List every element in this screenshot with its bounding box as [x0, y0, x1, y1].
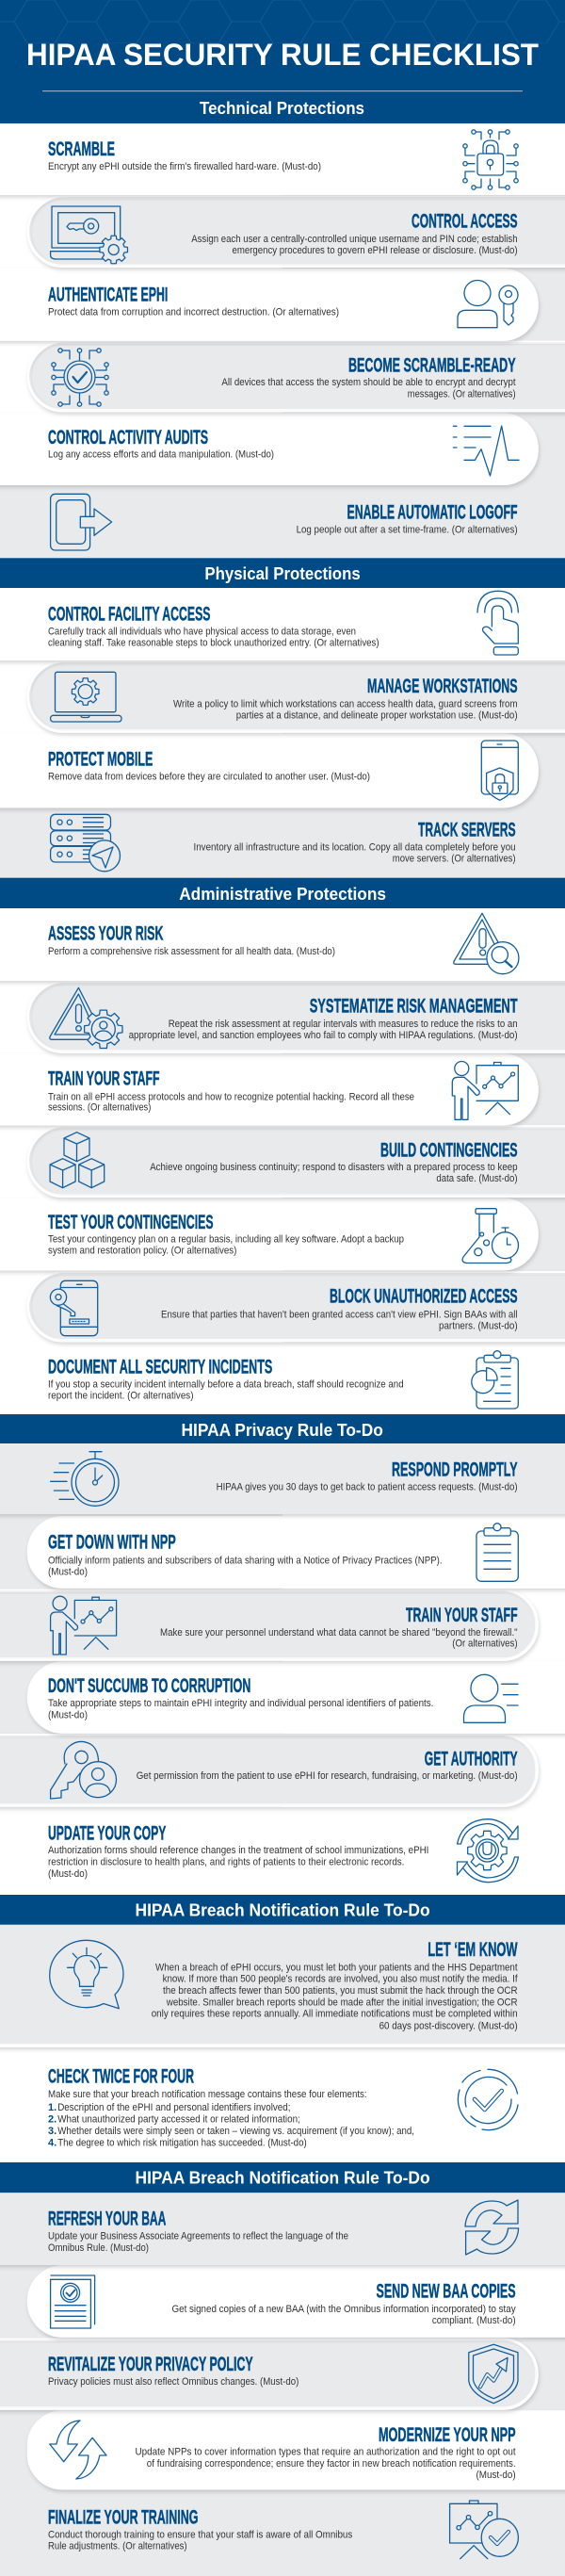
row: protect mobile: Remove data from devices before they are circulated to another user. (Must-do) — [48, 772, 370, 783]
icon: up and down curved arrows — [50, 2421, 106, 2479]
row: control access: Assign each user a centrally-controlled unique username and PIN code; establish — [191, 234, 518, 245]
icon: phone with shield lock — [481, 741, 518, 800]
row: refresh your BAA: REFRESH YOUR BAA — [48, 2209, 166, 2230]
row: scramble: SCRAMBLE — [48, 139, 115, 160]
row: track servers — [0, 806, 565, 878]
icon: key with user — [51, 1741, 117, 1799]
row: build contingencies — [29, 1127, 565, 1196]
row: respond promptly — [0, 1443, 565, 1514]
row: send new BAA copies: Get signed copies of a new BAA (with the Omnibus information incorporated) to stay — [171, 2304, 516, 2315]
icon: check in circles — [458, 2069, 518, 2130]
row: document all security incidents — [0, 1343, 565, 1414]
row: don't succumb to corruption — [29, 1663, 565, 1732]
row: train your staff (privacy) — [0, 1590, 537, 1659]
row: respond promptly: HIPAA gives you 30 days to get back to patient access requests. (Must-do) — [217, 1482, 518, 1493]
row: block unauthorized access — [29, 1273, 565, 1341]
icon: presenter with chart — [452, 1061, 518, 1119]
row: don't succumb to corruption: (Must-do) — [48, 1709, 88, 1720]
section bar: physical protections: Physical Protections — [204, 564, 361, 583]
row: scramble: Encrypt any ePHI outside the firm's firewalled hard-ware. (Must-do) — [48, 161, 321, 172]
icon: laptop with gear — [51, 672, 121, 722]
row: authenticate ePHI — [0, 270, 537, 339]
row: let 'em know: the breach affects fewer than 500 patients, you must submit the hack through the OCR — [163, 1985, 518, 1997]
row: finalize your training: Conduct thorough training to ensure that your staff is aware of all Omnibus — [48, 2529, 353, 2540]
row: refresh your BAA — [0, 2193, 565, 2265]
icon: user and key — [458, 281, 518, 328]
row: send new BAA copies — [29, 2267, 565, 2336]
row: control activity audits — [0, 415, 537, 483]
section bar: HIPAA breach notification rule to-do (omnibus): HIPAA Breach Notification Rule To-Do — [136, 2168, 430, 2187]
row: get down with NPP — [29, 1518, 565, 1587]
row: train your staff (security) — [0, 1055, 537, 1124]
numbered list — [48, 2102, 414, 2148]
row: build contingencies: Achieve ongoing business continuity; respond to disasters with a prepared process to keep — [150, 1162, 518, 1173]
row: finalize your training: FINALIZE YOUR TRAINING — [48, 2506, 198, 2528]
section bar: HIPAA breach notification rule to-do — [0, 1895, 565, 1925]
icon: laptop, key and gear — [51, 206, 127, 264]
icon: presenter with chart — [51, 1596, 117, 1655]
icon: clipboard — [476, 1524, 518, 1581]
icon: activity pulse — [453, 426, 519, 476]
row: systematize risk management — [29, 983, 565, 1052]
row: authenticate ePHI: AUTHENTICATE EPHI — [48, 284, 168, 305]
row: enable automatic logoff: Log people out after a set time-frame. (Or alternatives) — [297, 524, 518, 535]
numbered list: 4. — [48, 2137, 56, 2148]
row: train your staff (privacy): Make sure your personnel understand what data cannot be shared "beyond the firewall." — [160, 1627, 518, 1639]
section bar: administrative protections: Administrative Protections — [179, 885, 386, 904]
row: test your contingencies — [0, 1199, 537, 1269]
section bar: administrative protections — [0, 878, 565, 908]
row: update your copy: Authorization forms should reference changes in the treatment of school immunizations, ePHI — [48, 1845, 428, 1856]
row: get down with NPP: GET DOWN WITH NPP — [48, 1531, 176, 1553]
row: control access — [29, 197, 565, 266]
row: become scramble-ready: All devices that access the system should be able to encrypt and decrypt — [221, 377, 516, 388]
icon: user with lines — [463, 1674, 518, 1722]
row: get authority — [0, 1736, 537, 1805]
row: enable automatic logoff — [0, 483, 565, 559]
row: get down with NPP: Officially inform patients and subscribers of data sharing with a Notice of Privacy Practices (NPP). — [48, 1555, 443, 1566]
row: assess your risk: ASSESS YOUR RISK — [48, 923, 163, 945]
icon: warning triangle and gear user — [50, 987, 122, 1048]
row: revitalize your privacy policy — [0, 2340, 537, 2408]
row: document all security incidents: If you stop a security incident internally before a data breach, staff should recognize and — [48, 1378, 404, 1390]
section bar: HIPAA breach notification rule to-do (omnibus) — [0, 2162, 565, 2193]
icon: document with check — [51, 2275, 95, 2328]
row: block unauthorized access: partners. (Must-do) — [439, 1320, 518, 1331]
numbered list: 3. — [48, 2126, 56, 2137]
icon: phone with key — [50, 1280, 98, 1336]
icon: chart board with check — [450, 2501, 518, 2559]
row: revitalize your privacy policy: REVITALIZE YOUR PRIVACY POLICY — [48, 2354, 253, 2375]
row: let 'em know: website. Smaller breach reports should be made after the initial investigation; the OCR — [166, 1997, 518, 2008]
row: refresh your BAA: Omnibus Rule. (Must-do) — [48, 2242, 149, 2254]
row: control facility access: Carefully track all individuals who have physical access to data storage, even — [48, 626, 356, 637]
section heading: technical protections: Technical Protections — [200, 99, 364, 118]
row: modernize your NPP: Update NPPs to cover information types that require an authorization and the right to opt out — [136, 2447, 516, 2458]
row: finalize your training — [0, 2487, 565, 2576]
row: document all security incidents: DOCUMENT ALL SECURITY INCIDENTS — [48, 1356, 272, 1378]
row: update your copy — [0, 1807, 565, 1896]
row: test your contingencies: system and restoration policy. (Or alternatives) — [48, 1246, 236, 1257]
row: send new BAA copies: compliant. (Must-do) — [432, 2315, 516, 2326]
row: check twice for four: Make sure that your breach notification message contains these four elements: — [48, 2089, 367, 2100]
row: get down with NPP: (Must-do) — [48, 1566, 88, 1577]
row: control facility access: CONTROL FACILITY ACCESS — [48, 603, 211, 625]
row: modernize your NPP: (Must-do) — [476, 2470, 516, 2481]
icon: padlock circuit — [463, 130, 518, 189]
row: check twice for four — [0, 2046, 565, 2163]
row: update your copy: UPDATE YOUR COPY — [48, 1823, 166, 1845]
row: assess your risk — [0, 908, 565, 981]
icon: light bulb in speech bubble — [50, 1940, 123, 2009]
row: refresh your BAA: Update your Business Associate Agreements to reflect the language of the — [48, 2231, 348, 2242]
row: build contingencies: data safe. (Must-do) — [436, 1173, 518, 1184]
icon: circuit with check — [52, 349, 108, 406]
icon: logoff door — [51, 494, 112, 550]
icon: three cubes — [50, 1133, 105, 1188]
row: let 'em know: only requires these reports annually. All immediate notifications must be completed within — [152, 2009, 518, 2020]
row: protect mobile — [0, 735, 537, 807]
section bar: physical protections — [0, 558, 565, 588]
row: train your staff (security): sessions. (Or alternatives) — [48, 1102, 151, 1114]
row: track servers: move servers. (Or alternatives) — [393, 854, 516, 865]
icon: stopwatch — [51, 1452, 119, 1506]
icon: refresh arrows — [465, 2200, 519, 2255]
row: control activity audits: Log any access efforts and data manipulation. (Must-do) — [48, 449, 274, 461]
row: modernize your NPP: of fundraising correspondence; ensure they factor in new breach notification requirements. — [147, 2458, 516, 2470]
numbered list: Description of the ePHI and personal identifiers involved; — [57, 2102, 291, 2113]
row: train your staff (privacy): (Or alternatives) — [452, 1639, 518, 1650]
row: test your contingencies: TEST YOUR CONTINGENCIES — [48, 1212, 213, 1233]
row: track servers: Inventory all infrastructure and its location. Copy all data completely before you — [194, 841, 516, 853]
row: authenticate ePHI: Protect data from corruption and incorrect destruction. (Or alternatives) — [48, 306, 339, 318]
numbered list: What unauthorized party accessed it or related information; — [57, 2114, 300, 2126]
section bar: HIPAA breach notification rule to-do: HIPAA Breach Notification Rule To-Do — [136, 1901, 430, 1920]
row: manage workstations: Write a policy to limit which workstations can access health data, guard screens from — [173, 699, 518, 710]
row: protect mobile: PROTECT MOBILE — [48, 748, 153, 770]
row: become scramble-ready — [29, 342, 565, 411]
row: become scramble-ready: messages. (Or alternatives) — [408, 388, 516, 399]
title: HIPAA SECURITY RULE CHECKLIST — [26, 38, 539, 72]
row: let 'em know: When a breach of ePHI occurs, you must let both your patients and the HHS Department — [155, 1962, 518, 1973]
row: control access: emergency procedures to govern ePHI release or disclosure. (Must-do) — [232, 245, 518, 256]
row: train your staff (security): TRAIN YOUR STAFF — [48, 1068, 160, 1090]
icon: shield with rising arrow — [469, 2344, 518, 2404]
row: block unauthorized access: Ensure that parties that haven't been granted access can't view ePHI. Sign BAAs with all — [161, 1309, 518, 1320]
row: modernize your NPP — [29, 2412, 565, 2488]
row: test your contingencies: Test your contingency plan on a regular basis, including all key software. Adopt a backup — [48, 1234, 404, 1246]
icon: clipboard with pie chart — [472, 1351, 518, 1409]
icon: server stack with navigator — [51, 814, 121, 872]
row: let 'em know: 60 days post-discovery. (Must-do) — [379, 2020, 518, 2031]
row: don't succumb to corruption: DON'T SUCCUMB TO CORRUPTION — [48, 1675, 250, 1697]
row: manage workstations — [29, 662, 565, 731]
row: scramble — [0, 123, 565, 195]
icon: gear with refresh arrows — [458, 1819, 518, 1883]
row: control facility access — [0, 588, 565, 660]
numbered list: 1. — [48, 2102, 56, 2113]
row: assess your risk: Perform a comprehensive risk assessment for all health data. (Must-do) — [48, 946, 335, 957]
header banner — [0, 0, 565, 123]
section bar: HIPAA privacy rule to-do — [0, 1414, 565, 1444]
icon: touch hand — [477, 591, 518, 655]
row: finalize your training: Rule adjustments. (Or alternatives) — [48, 2541, 187, 2552]
row: document all security incidents: report the incident. (Or alternatives) — [48, 1390, 194, 1401]
row: check twice for four: CHECK TWICE FOR FOUR — [48, 2066, 194, 2088]
numbered list: 2. — [48, 2114, 56, 2126]
row: revitalize your privacy policy: Privacy policies must also reflect Omnibus changes. (Must-do) — [48, 2376, 299, 2388]
row: systematize risk management: appropriate level, and sanction employees who fail to comply with HIPAA regulations. (Must-do) — [129, 1030, 518, 1041]
row: update your copy: (Must-do) — [48, 1868, 88, 1880]
row: systematize risk management: Repeat the risk assessment at regular intervals with measures to reduce the risks to an — [169, 1019, 518, 1030]
numbered list: Whether details were simply seen or taken – viewing vs. acquirement (if you know); and, — [57, 2126, 414, 2137]
row: control facility access: cleaning staff. Take reasonable steps to block unauthorized entry. (Or alternatives) — [48, 638, 379, 649]
row: don't succumb to corruption: Take appropriate steps to maintain ePHI integrity and individual personal identifiers of patients. — [48, 1698, 433, 1709]
row: let 'em know — [0, 1922, 565, 2046]
section bar: HIPAA privacy rule to-do: HIPAA Privacy Rule To-Do — [181, 1421, 383, 1440]
row: let 'em know: know. If more than 500 people's records are involved, you also must notify the media. If — [163, 1974, 518, 1985]
icon: warning triangle with magnifier — [454, 913, 519, 974]
icon: flask with clock — [462, 1209, 518, 1263]
row: train your staff (security): Train on all ePHI access protocols and how to recognize potential hacking. Record all these — [48, 1091, 414, 1102]
row: get authority: Get permission from the patient to use ePHI for research, fundraising, or marketing. (Must-do) — [137, 1770, 518, 1782]
row: update your copy: restriction in disclosure to health plans, and rights of patients to their electronic records. — [48, 1857, 404, 1868]
row: manage workstations: parties at a distance, and delineate proper workstation use. (Must-do) — [236, 710, 518, 722]
row: control activity audits: CONTROL ACTIVITY AUDITS — [48, 427, 208, 448]
numbered list: The degree to which risk mitigation has succeeded. (Must-do) — [57, 2137, 307, 2148]
